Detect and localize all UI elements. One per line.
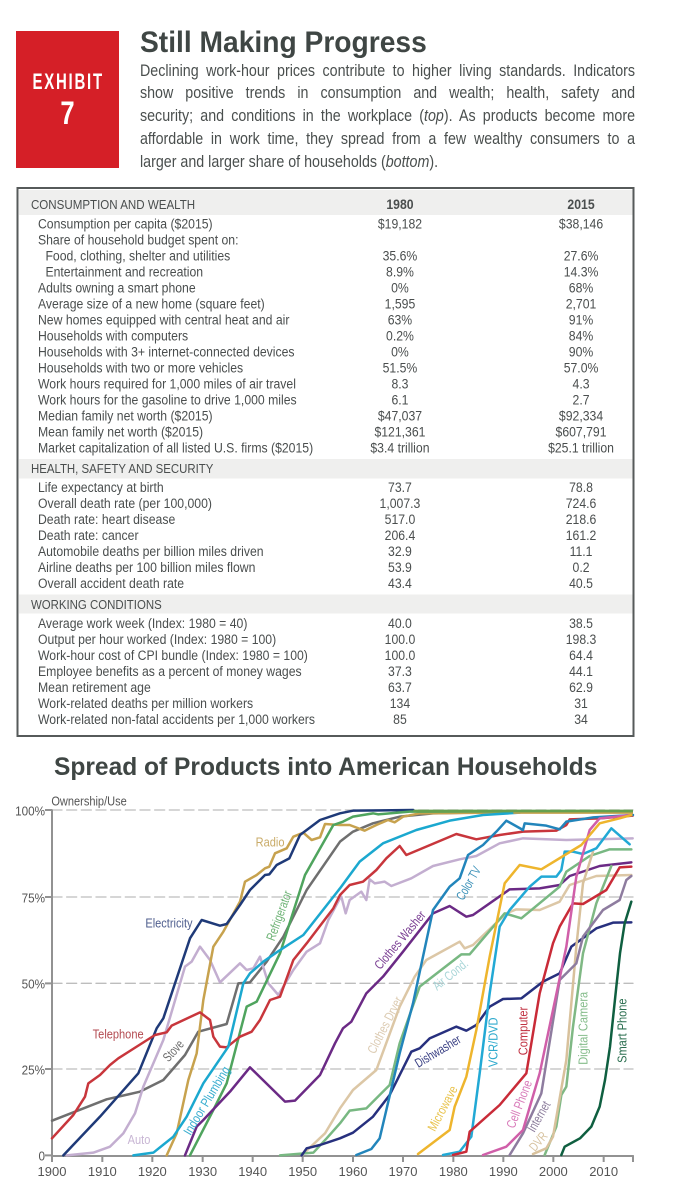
section: consumption and wealth: Entertainment and recreation	[45, 264, 203, 280]
horizontal gridlines	[52, 810, 633, 1069]
y axis labels: 25%	[22, 1063, 45, 1077]
curve: color tv	[356, 815, 633, 1155]
curve: cell phone	[483, 815, 631, 1155]
intro text block	[140, 62, 636, 171]
section: working conditions: 100.0	[385, 647, 415, 663]
table header row	[31, 196, 595, 212]
section: working conditions: 38.5	[569, 615, 593, 631]
section: working conditions: Employee benefits as a percent of money wages	[38, 663, 302, 679]
section: consumption and wealth: Work hours for the gasoline to drive 1,000 miles	[38, 392, 297, 408]
section: consumption and wealth: Average size of a new home (square feet)	[38, 296, 265, 312]
label: cell phone: Cell Phone	[504, 1078, 535, 1130]
intro text block: show positive trends in consumption and wealth; health, safety and	[140, 84, 635, 102]
section: health, safety and security: 161.2	[566, 527, 596, 543]
exhibit badge	[16, 31, 119, 168]
curve: digital camera	[545, 866, 611, 1155]
table border	[18, 188, 634, 736]
line chart: ownership of products	[15, 793, 634, 1179]
label: indoor plumbing: Indoor Plumbing	[180, 1063, 233, 1138]
label: auto: Auto	[128, 1132, 151, 1147]
badge label: EXHIBIT	[32, 69, 104, 94]
section: health, safety and security: 43.4	[388, 575, 412, 591]
section: working conditions: 134	[390, 695, 410, 711]
section: consumption and wealth: 1,595	[385, 296, 415, 312]
label: color tv: Color TV	[454, 864, 485, 903]
x axis labels: 1980	[439, 1164, 468, 1179]
section: consumption and wealth: Share of household budget spent on:	[38, 232, 239, 248]
curve: clothes dryer	[302, 875, 631, 1155]
section: consumption and wealth	[38, 216, 614, 456]
section: health, safety and security: 53.9	[388, 559, 412, 575]
section: working conditions: 63.7	[388, 679, 412, 695]
curve: dishwasher	[302, 922, 631, 1155]
section: health, safety and security: Automobile deaths per billion miles driven	[38, 543, 264, 559]
section bands	[19, 190, 633, 614]
title: Still Making Progress	[140, 26, 427, 59]
section: working conditions: Mean retirement age	[38, 679, 151, 695]
intro text block: larger and larger share of households (bottom).	[140, 153, 438, 171]
section: working conditions: Work-related deaths per million workers	[38, 695, 253, 711]
section: health, safety and security: Life expectancy at birth	[38, 479, 164, 495]
label: refrigerator: Refrigerator	[265, 889, 295, 943]
section: consumption and wealth: $38,146	[559, 216, 603, 232]
curve: clothes washer	[185, 862, 631, 1155]
section: health, safety and security: Death rate: cancer	[38, 527, 139, 543]
intro text block: Declining work-hour prices contribute to higher living standards. Indicators	[140, 62, 635, 80]
label: vcr/dvd: VCR/DVD	[485, 1017, 501, 1067]
axes	[45, 809, 634, 1162]
section: health, safety and security: Overall death rate (per 100,000)	[38, 495, 212, 511]
section: health, safety and security: Airline deaths per 100 billion miles flown	[38, 559, 255, 575]
section: consumption and wealth: New homes equipped with central heat and air	[38, 312, 290, 328]
section: working conditions: 37.3	[388, 663, 412, 679]
section heading: working conditions: WORKING CONDITIONS	[31, 597, 162, 612]
section: consumption and wealth: 14.3%	[564, 264, 599, 280]
curve: microwave	[418, 815, 631, 1154]
section: health, safety and security	[38, 479, 596, 591]
section: health, safety and security: 32.9	[388, 543, 412, 559]
label: radio: Radio	[256, 835, 285, 850]
section: consumption and wealth: 0%	[391, 344, 409, 360]
section: consumption and wealth: Work hours required for 1,000 miles of air travel	[38, 376, 296, 392]
label: air cond: Air Cond.	[431, 957, 471, 994]
data table panel	[16, 187, 634, 737]
table header row: 1980	[386, 196, 414, 212]
section: health, safety and security: Overall accident death rate	[38, 575, 184, 591]
section: consumption and wealth: Food, clothing, shelter and utilities	[45, 248, 230, 264]
section: working conditions: Output per hour worked (Index: 1980 = 100)	[38, 631, 276, 647]
section: health, safety and security: 73.7	[388, 479, 412, 495]
curve: air conditioning	[280, 849, 631, 1155]
section: consumption and wealth: 57.0%	[564, 360, 599, 376]
section: consumption and wealth: 51.5%	[383, 360, 418, 376]
table header row: 2015	[567, 196, 595, 212]
label: clothes washer: Clothes Washer	[372, 908, 429, 972]
label: smart phone: Smart Phone	[615, 998, 630, 1063]
section: consumption and wealth: 27.6%	[564, 248, 599, 264]
section: working conditions	[38, 615, 596, 727]
section: consumption and wealth: Median family net worth ($2015)	[38, 408, 213, 424]
label: dvr: DVR	[527, 1130, 551, 1154]
table header row: CONSUMPTION AND WEALTH	[31, 197, 195, 212]
y axis labels: 0	[38, 1149, 45, 1164]
x axis labels: 1950	[288, 1164, 317, 1179]
label: stove: Stove	[161, 1038, 187, 1065]
section: working conditions: 31	[574, 695, 588, 711]
curve: auto	[67, 838, 633, 1155]
section: working conditions: 40.0	[388, 615, 412, 631]
section: working conditions: Average work week (Index: 1980 = 40)	[38, 615, 247, 631]
x axis labels: 2000	[539, 1164, 568, 1179]
section: consumption and wealth: Households with 3+ internet-connected devices	[38, 344, 295, 360]
section: health, safety and security: 517.0	[385, 511, 415, 527]
section: consumption and wealth: $47,037	[378, 408, 422, 424]
section: health, safety and security: 218.6	[566, 511, 596, 527]
label: microwave: Microwave	[425, 1084, 461, 1134]
x axis labels: 1960	[339, 1164, 367, 1179]
intro text block: affordable in work time, they spread from a few wealthy consumers to a	[140, 130, 635, 148]
section: health, safety and security: 1,007.3	[380, 495, 420, 511]
section: consumption and wealth: Households with computers	[38, 328, 188, 344]
section: consumption and wealth: 2.7	[573, 392, 590, 408]
section: health, safety and security: 724.6	[566, 495, 596, 511]
curve: electricity	[63, 810, 413, 1155]
label: clothes dryer: Clothes Dryer	[365, 994, 406, 1056]
section: consumption and wealth: 6.1	[391, 392, 408, 408]
section: working conditions: 64.4	[569, 647, 593, 663]
curve labels	[93, 835, 630, 1154]
section: consumption and wealth: Market capitalization of all listed U.S. firms ($2015)	[38, 440, 313, 456]
label: digital camera: Digital Camera	[575, 992, 591, 1065]
x axis labels: 1940	[238, 1164, 267, 1179]
section: consumption and wealth: 2,701	[566, 296, 596, 312]
section: consumption and wealth: $92,334	[559, 408, 603, 424]
curve: telephone	[52, 816, 633, 1138]
section: consumption and wealth: $25.1 trillion	[548, 440, 614, 456]
section: health, safety and security: 78.8	[569, 479, 593, 495]
x axis labels	[38, 1164, 618, 1179]
curve: internet	[510, 876, 631, 1155]
label: dishwasher: Dishwasher	[413, 1033, 464, 1071]
saturated top band	[413, 811, 633, 813]
section: health, safety and security: 40.5	[569, 575, 593, 591]
label: computer: Computer	[515, 1007, 531, 1055]
label: electricity: Electricity	[145, 915, 193, 931]
section: working conditions: Work-hour cost of CPI bundle (Index: 1980 = 100)	[38, 647, 308, 663]
intro text block: security; and conditions in the workplace (top). As products become more	[140, 107, 635, 125]
curve: refrigerator	[190, 811, 520, 1155]
section: consumption and wealth: $3.4 trillion	[370, 440, 430, 456]
section: consumption and wealth: Consumption per capita ($2015)	[38, 216, 213, 232]
section: working conditions: 44.1	[569, 663, 593, 679]
x axis labels: 1900	[38, 1164, 66, 1179]
section: consumption and wealth: 90%	[569, 344, 594, 360]
section: consumption and wealth: 91%	[569, 312, 594, 328]
section: health, safety and security: 206.4	[385, 527, 415, 543]
section: consumption and wealth: 0.2%	[386, 328, 414, 344]
section heading: health: HEALTH, SAFETY AND SECURITY	[31, 461, 213, 476]
x axis labels: 1920	[138, 1164, 167, 1179]
curve: smart phone	[561, 902, 631, 1155]
y axis labels	[15, 804, 45, 1164]
curve: dvr	[533, 852, 593, 1154]
section: consumption and wealth: 0%	[391, 280, 409, 296]
curve: indoor plumbing	[133, 813, 520, 1155]
section: working conditions: 85	[393, 711, 407, 727]
chart heading: Spread of Products into American Households	[54, 753, 597, 781]
section: working conditions: Work-related non-fatal accidents per 1,000 workers	[38, 711, 315, 727]
curve: vcr/dvd	[443, 828, 630, 1155]
section: consumption and wealth: $607,791	[556, 424, 607, 440]
section: health, safety and security: Death rate: heart disease	[38, 511, 175, 527]
curve: stove	[52, 812, 500, 1121]
section: health, safety and security: 0.2	[573, 559, 590, 575]
section: consumption and wealth: 4.3	[573, 376, 590, 392]
y axis labels: 100%	[15, 804, 45, 818]
y axis title: Ownership/Use	[51, 793, 127, 809]
x axis labels: 1910	[88, 1164, 117, 1179]
section: consumption and wealth: 8.3	[391, 376, 408, 392]
badge number: 7	[60, 95, 75, 131]
section: working conditions: 198.3	[566, 631, 596, 647]
section: health, safety and security: 11.1	[570, 543, 592, 559]
x axis labels: 2010	[589, 1164, 618, 1179]
label: internet: Internet	[526, 1099, 554, 1135]
section: working conditions: 62.9	[569, 679, 593, 695]
section: consumption and wealth: Households with two or more vehicles	[38, 360, 243, 376]
section: consumption and wealth: 68%	[569, 280, 594, 296]
section: consumption and wealth: Mean family net worth ($2015)	[38, 424, 203, 440]
x axis labels: 1990	[489, 1164, 518, 1179]
section: consumption and wealth: 8.9%	[386, 264, 414, 280]
section: consumption and wealth: 35.6%	[383, 248, 418, 264]
section: consumption and wealth: 63%	[388, 312, 413, 328]
section: consumption and wealth: $19,182	[378, 216, 422, 232]
x axis labels: 1970	[389, 1164, 417, 1179]
section: consumption and wealth: Adults owning a smart phone	[38, 280, 196, 296]
y axis labels: 50%	[22, 977, 45, 992]
x axis labels: 1930	[188, 1164, 217, 1179]
curve: computer	[453, 867, 631, 1155]
section: consumption and wealth: $121,361	[374, 424, 425, 440]
label: telephone: Telephone	[93, 1026, 144, 1042]
section: working conditions: 34	[574, 711, 588, 727]
y axis labels: 75%	[22, 891, 45, 905]
section: consumption and wealth: 84%	[569, 328, 594, 344]
section: working conditions: 100.0	[385, 631, 415, 647]
curve: radio	[167, 812, 520, 1155]
